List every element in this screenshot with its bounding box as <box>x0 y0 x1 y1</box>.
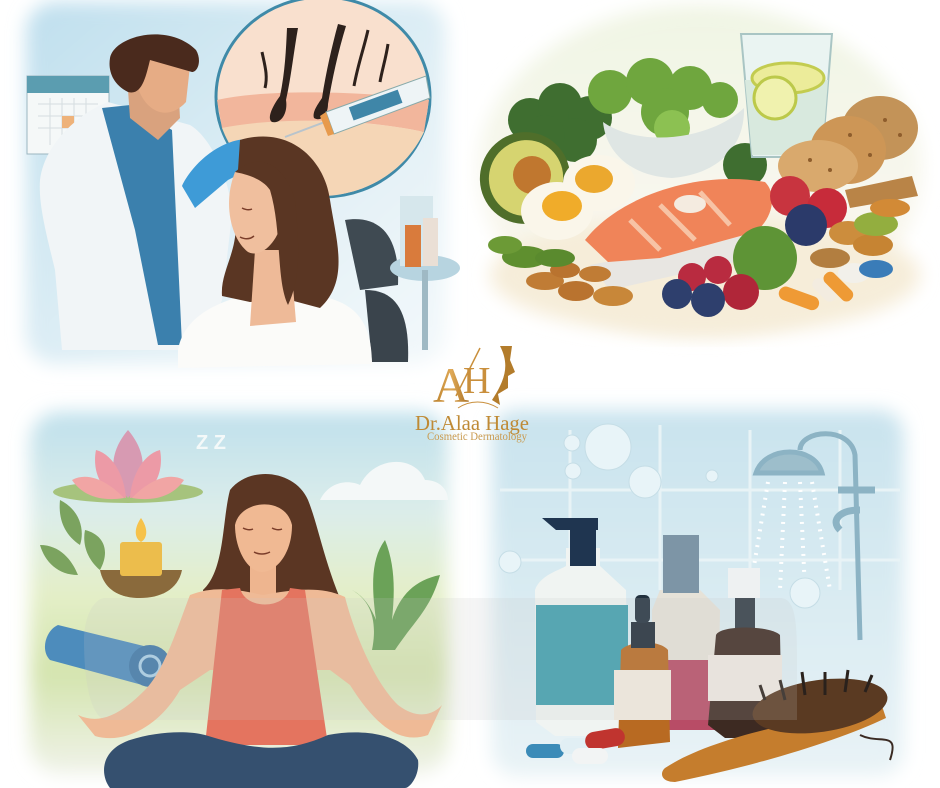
translucent watermark band <box>84 598 797 720</box>
icon: shower <box>756 434 875 640</box>
candle <box>100 518 182 598</box>
panel: doctor treatment <box>26 0 460 368</box>
panel: relaxation <box>30 412 448 788</box>
eggs <box>521 155 635 240</box>
panel: nutrition <box>467 5 922 335</box>
water spray <box>750 482 830 590</box>
logo name: Dr.Alaa Hage <box>415 411 529 435</box>
lotion bottle <box>652 535 720 730</box>
logo monogram: A <box>433 357 469 413</box>
dropper bottle <box>614 595 671 748</box>
logo monogram <box>433 346 515 413</box>
plants left <box>40 500 105 575</box>
berries <box>662 176 847 317</box>
panel: hair care products <box>492 410 904 782</box>
plants right <box>352 540 440 650</box>
salmon <box>585 179 772 290</box>
capsules <box>526 727 626 764</box>
logo monogram: H <box>463 360 490 402</box>
cloud <box>320 462 448 500</box>
chair and table <box>345 196 460 362</box>
logo subtitle: Cosmetic Dermatology <box>427 431 527 443</box>
spray bottle <box>708 568 782 738</box>
doctor <box>40 34 263 350</box>
icon: syringe <box>285 76 430 137</box>
patient <box>178 136 372 368</box>
rolled towel <box>45 625 171 687</box>
water glass with lemon <box>741 34 832 157</box>
icon: lotus <box>53 430 203 503</box>
avocado <box>467 119 583 237</box>
nuts, beans and capsules <box>488 199 910 312</box>
bread <box>778 96 918 208</box>
sleep letters: Z Z <box>196 432 226 454</box>
woman meditating <box>78 474 442 788</box>
icon: calendar <box>27 76 109 154</box>
magnified scalp circle <box>216 0 430 197</box>
bathroom tiles <box>500 425 900 590</box>
bubbles <box>499 424 820 608</box>
logo <box>415 346 529 443</box>
greens and bowl <box>508 58 767 187</box>
hairbrush <box>662 670 893 782</box>
shampoo bottle <box>535 518 628 736</box>
